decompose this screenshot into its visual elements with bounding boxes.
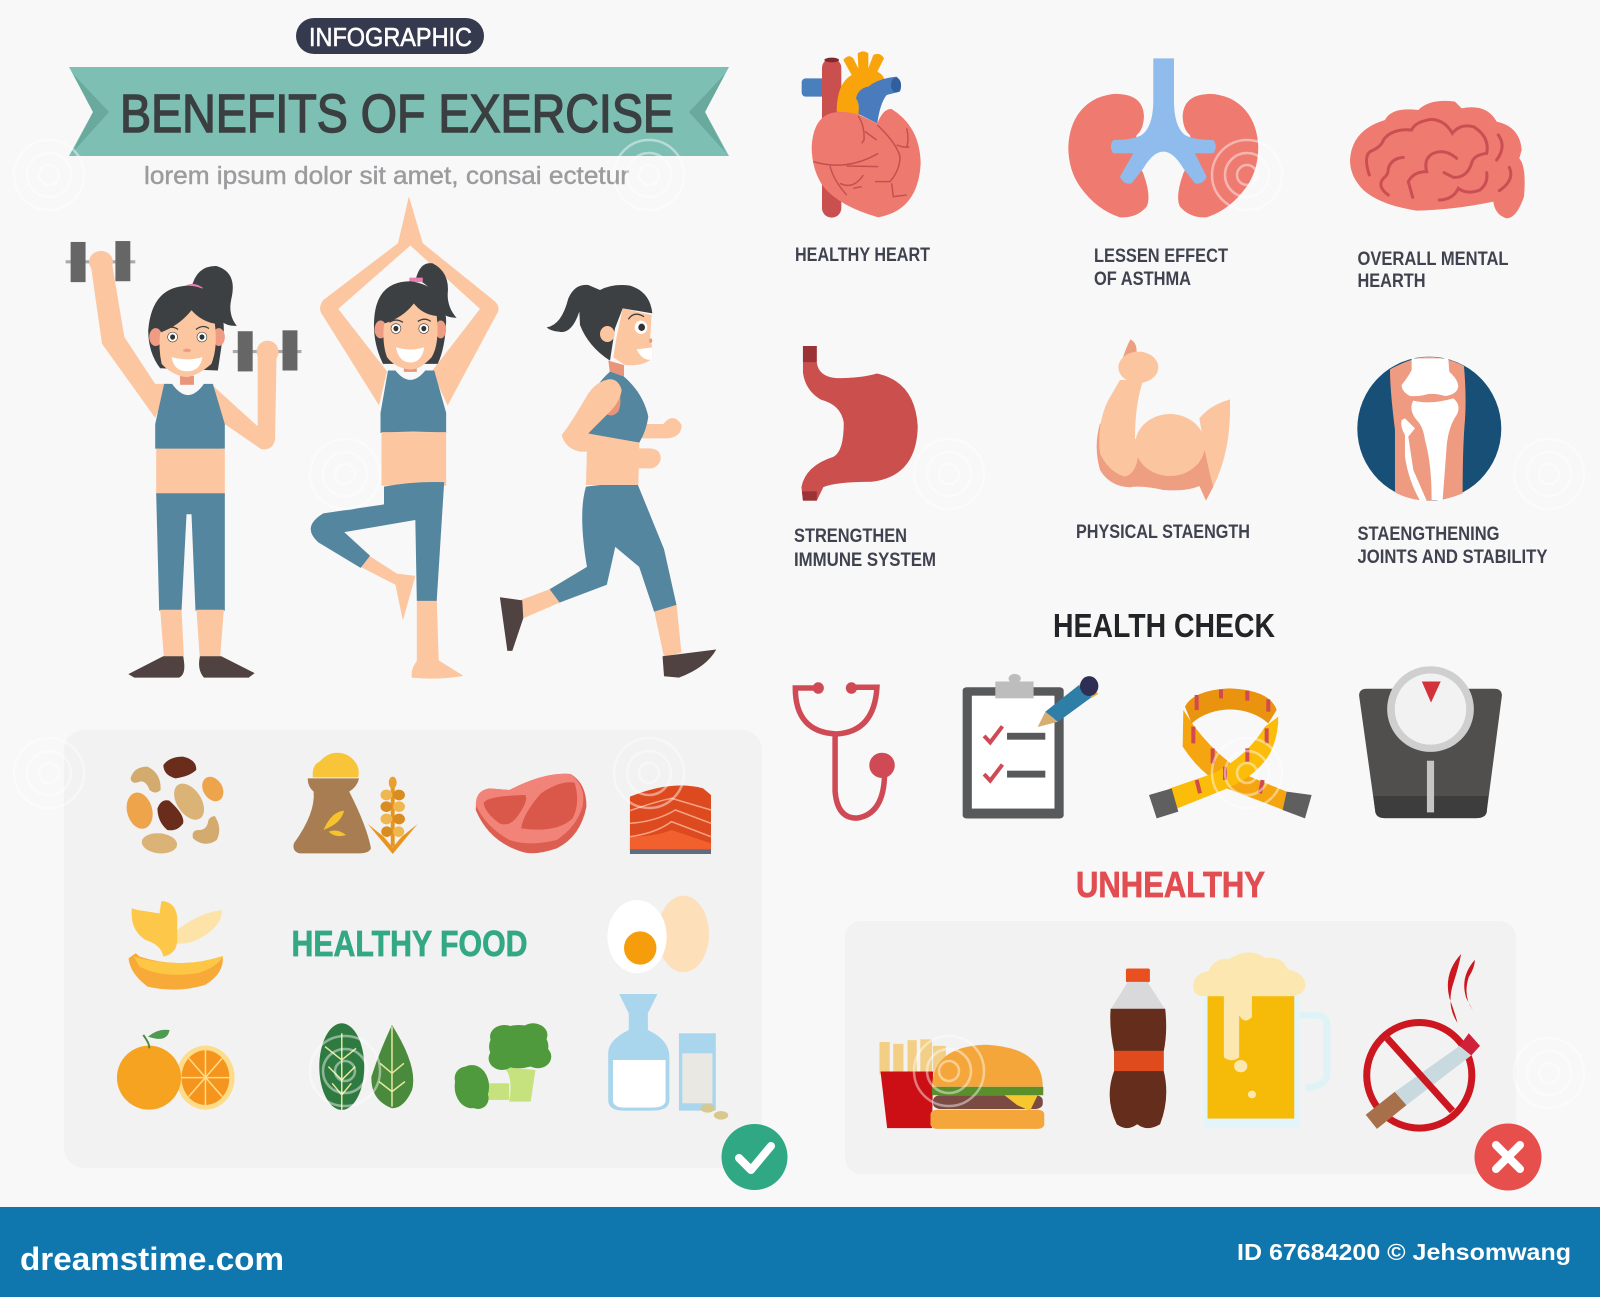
icon: flexed arm — [1097, 339, 1230, 501]
icon: spinach leaves — [319, 1023, 413, 1110]
label: staengthening joints and stability — [1358, 523, 1548, 568]
label: lessen effect of asthma — [1094, 245, 1228, 290]
icon: grain sack and wheat — [293, 753, 418, 854]
icon: milk bottle and glass — [608, 994, 728, 1120]
icon: beer mug — [1193, 952, 1327, 1128]
label: lessen effect of asthma: OF ASTHMA — [1094, 268, 1191, 290]
footer bar — [0, 1207, 1600, 1297]
icon: brain — [1350, 101, 1525, 218]
heading: unhealthy: UNHEALTHY — [1076, 864, 1265, 905]
label: overall mental hearth: OVERALL MENTAL — [1358, 248, 1509, 270]
icon: stethoscope — [795, 682, 895, 818]
icon: cola bottle — [1110, 969, 1166, 1128]
label: strengthen immune system: STRENGTHEN — [794, 525, 907, 547]
figure: woman lifting dumbbells — [66, 241, 301, 678]
panel: healthy food — [64, 730, 762, 1168]
icon: bananas — [129, 901, 223, 990]
label: strengthen immune system: IMMUNE SYSTEM — [794, 549, 936, 571]
panel: unhealthy — [845, 921, 1516, 1174]
figure: woman running — [500, 285, 716, 678]
label: staengthening joints and stability: JOINTS AND STABILITY — [1358, 546, 1548, 568]
icon: weighing scale — [1359, 666, 1502, 818]
footer bar: dreamstime.com — [20, 1241, 284, 1277]
icon: steak — [476, 774, 586, 853]
icon: knee joint — [1357, 357, 1501, 501]
label: strengthen immune system — [794, 525, 936, 571]
icon: fries and burger — [879, 1039, 1044, 1129]
icon: nuts — [123, 757, 227, 855]
label: physical staength: PHYSICAL STAENGTH — [1076, 521, 1250, 543]
badge: infographic pill: INFOGRAPHIC — [309, 22, 472, 52]
label: overall mental hearth: HEARTH — [1358, 270, 1426, 292]
label: overall mental hearth — [1358, 248, 1509, 292]
icon: green check badge — [722, 1124, 788, 1190]
icon: measuring tape — [1149, 688, 1312, 818]
icon: lungs — [1068, 58, 1258, 217]
label: staengthening joints and stability: STAENGTHENING — [1358, 523, 1500, 545]
heading: healthy food: HEALTHY FOOD — [292, 923, 528, 964]
heading: health check: HEALTH CHECK — [1053, 607, 1275, 644]
title ribbon — [69, 67, 729, 156]
icon: clipboard with pencil — [963, 674, 1098, 819]
label: healthy heart: HEALTHY HEART — [795, 244, 930, 266]
icon: stomach — [801, 346, 918, 501]
icon: red cross badge — [1474, 1124, 1542, 1190]
icon: broccoli — [455, 1023, 551, 1109]
footer bar: ID 67684200 © Jehsomwang — [1237, 1239, 1571, 1265]
label: lessen effect of asthma: LESSEN EFFECT — [1094, 245, 1228, 267]
title ribbon: BENEFITS OF EXERCISE — [120, 84, 674, 144]
subtitle: lorem ipsum dolor sit amet, consai ectetur — [144, 162, 629, 190]
icon: salmon fillet — [630, 786, 711, 854]
figure: woman in yoga tree pose — [311, 196, 499, 679]
icon: orange — [117, 1030, 235, 1110]
icon: heart — [802, 51, 921, 218]
icon: no smoking sign — [1366, 954, 1480, 1129]
icon: boiled egg — [607, 896, 709, 973]
